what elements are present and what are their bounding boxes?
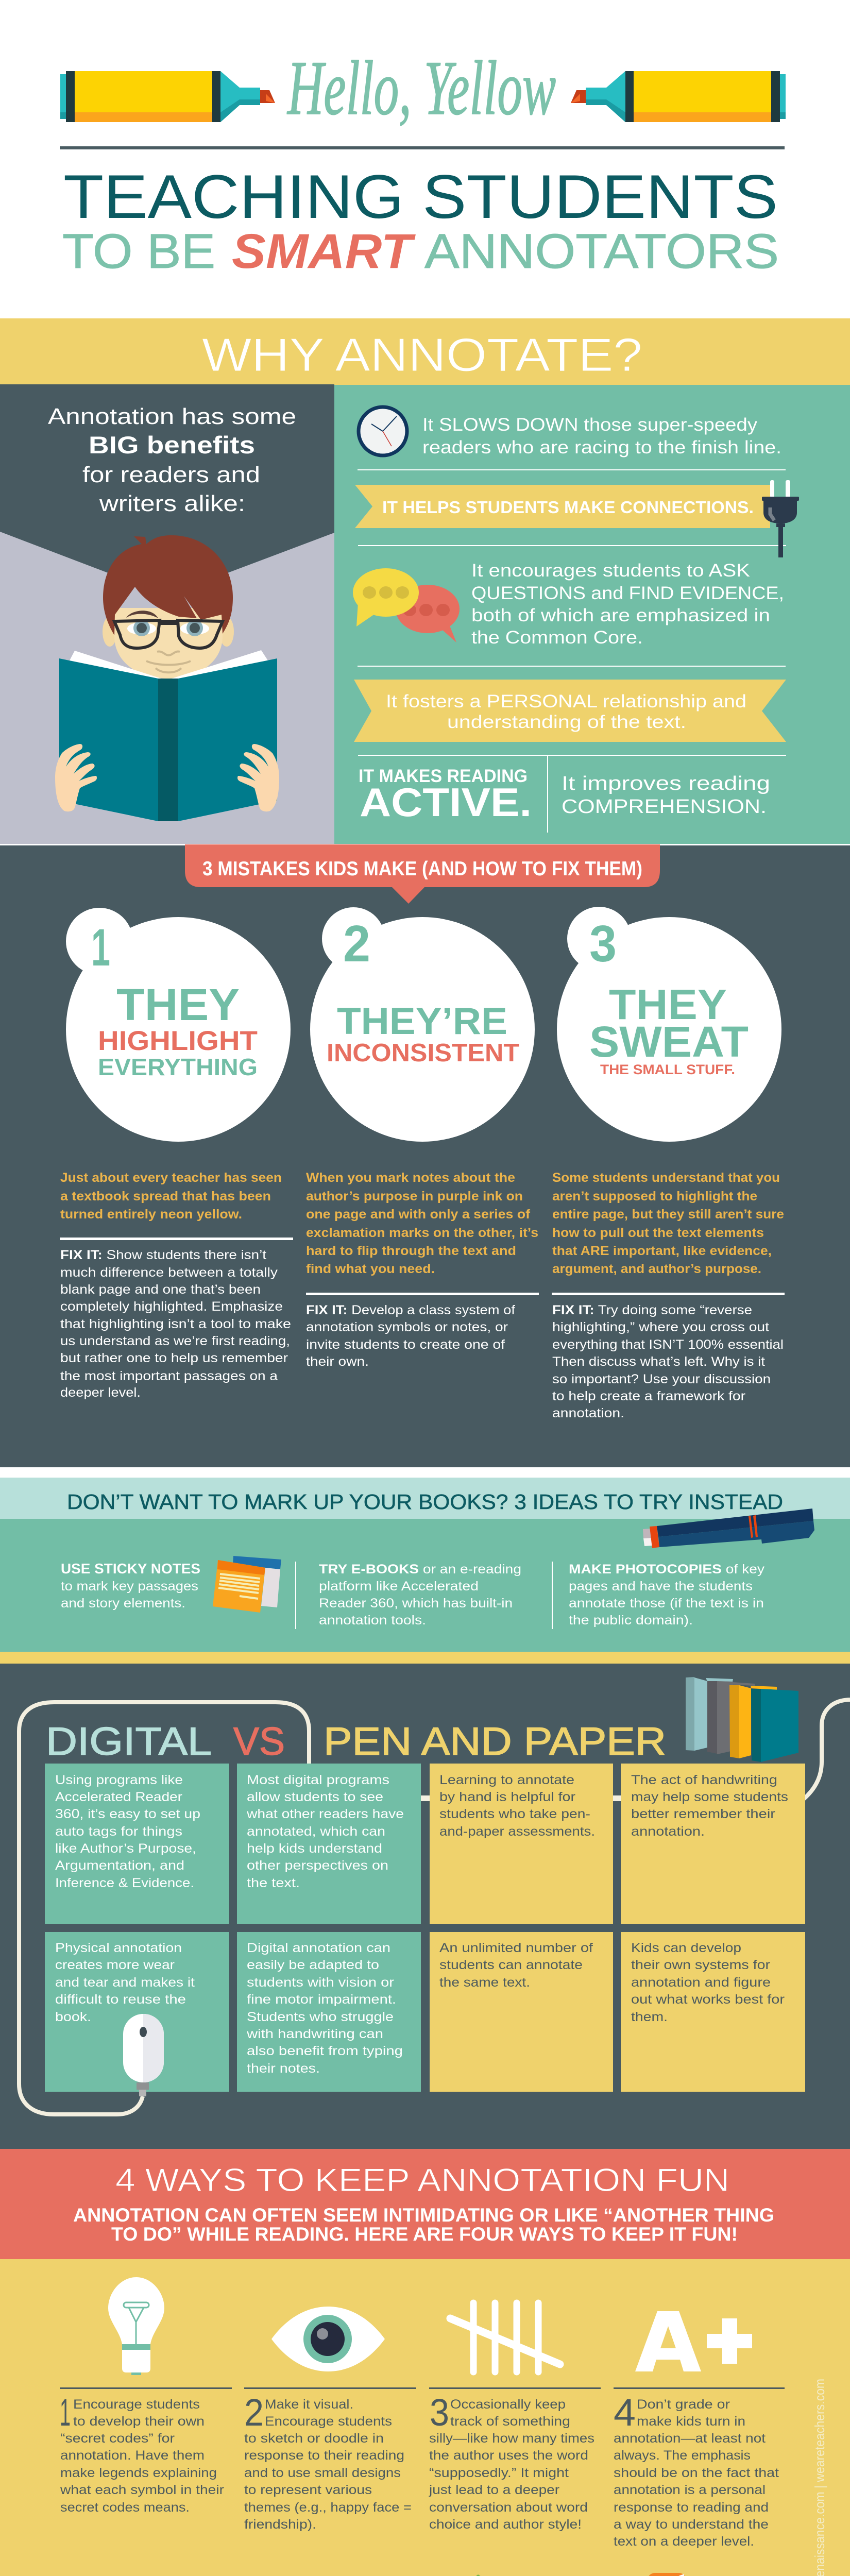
card: wear and tear: Physical annotation	[55, 1941, 182, 1955]
main title: SMART	[232, 224, 416, 279]
text: e-books	[319, 1562, 521, 1628]
main title: TEACHING STUDENTS	[63, 162, 778, 231]
text: way 3: “supposedly.” It might	[429, 2466, 569, 2480]
icon: clock	[359, 407, 407, 455]
circle: mistake 3: THEY	[609, 980, 727, 1028]
card: adapted	[237, 1932, 421, 2092]
card: annotate by hand: by hand is helpful for	[439, 1790, 575, 1804]
text: mistake 1 description: Just about every teacher has seen	[60, 1171, 282, 1185]
logo: accelerated reader 360	[648, 2573, 772, 2576]
heading: digital vs pen and paper: PEN AND PAPER	[324, 1720, 666, 1764]
text: mistake 2 description: author’s purpose in purple ink on	[306, 1189, 523, 1204]
card: own systems: annotation and figure	[631, 1975, 771, 1990]
text: way 3: conversation about word	[429, 2500, 588, 2515]
text: way 2: to represent various	[244, 2483, 372, 2497]
text: way 4: response to reading and	[614, 2500, 769, 2515]
text: ask questions: QUESTIONS and FIND EVIDENCE,	[471, 583, 784, 603]
card: auto tags: Inference & Evidence.	[55, 1876, 194, 1890]
text: sticky notes: and story elements.	[61, 1596, 185, 1611]
card: handwriting: better remember their	[631, 1807, 775, 1821]
panel: 3 mistakes	[0, 844, 850, 1467]
text: mistake 2 description: one page and with only a series of	[306, 1207, 531, 1222]
card: adapted: Students who struggle	[247, 2010, 394, 2024]
text: way 1: what each symbol in their	[60, 2483, 224, 2497]
text: mistake 2 description: When you mark notes about the	[306, 1171, 515, 1185]
text: way 4: always. The emphasis	[614, 2448, 751, 2463]
circle: mistake 2: THEY’RE	[337, 1001, 507, 1042]
text: slows down: It SLOWS DOWN those super-speedy	[422, 415, 758, 435]
text: mistake 3 fix: FIX IT: Try doing some “reverse	[552, 1303, 752, 1317]
circle: mistake 1: THEY	[116, 980, 240, 1030]
card: own systems: Kids can develop	[631, 1941, 741, 1955]
text: mistake 3 fix: highlighting,” where you cross out	[552, 1320, 769, 1334]
text: mistake 1 fix: but rather one to help us remember	[60, 1351, 288, 1365]
icon: mouse cord	[19, 1700, 850, 2114]
text: way 4	[614, 2391, 779, 2549]
text: way 3: 3	[430, 2391, 449, 2434]
card: wear and tear: and tear and makes it	[55, 1975, 195, 1990]
text: way 1: 1	[60, 2391, 71, 2434]
card: unlimited: the same text.	[439, 1975, 530, 1990]
panel: benefits list	[334, 385, 850, 844]
card: own systems: them.	[631, 2010, 668, 2024]
text: way 3: Occasionally keep	[450, 2397, 566, 2412]
circle: mistake 1: 1	[91, 918, 110, 977]
circle: mistake 3: THE SMALL STUFF.	[600, 1062, 735, 1077]
card: other readers: other perspectives on	[247, 1858, 388, 1873]
card: other readers: what other readers have	[246, 1807, 404, 1821]
circle: mistake 1: EVERYTHING	[98, 1054, 258, 1080]
text: way 3: just lead to a deeper	[429, 2483, 559, 2497]
card: unlimited: students can annotate	[439, 1958, 583, 1972]
text: mistake 2 fix: annotation symbols or notes, or	[306, 1320, 508, 1334]
circle: mistake 3: SWEAT	[589, 1018, 749, 1066]
ribbon: personal relationship: understanding of the text.	[447, 712, 686, 732]
text: way 2: Make it visual.	[265, 2397, 353, 2412]
card: auto tags	[45, 1764, 229, 1924]
card: annotate by hand	[430, 1764, 613, 1924]
text: mistake 3 description: how to pull out the text elements	[552, 1226, 764, 1240]
text: e-books: platform like Accelerated	[319, 1579, 479, 1594]
card: other readers: the text.	[247, 1876, 300, 1890]
text: slows down	[422, 415, 781, 457]
circle: mistake 3: 3	[589, 915, 617, 973]
text: way 2: and to use small designs	[244, 2466, 401, 2480]
icon: speech bubbles	[353, 568, 460, 642]
text: mistake 2 description: find what you need.	[306, 1262, 435, 1276]
text: way 4: 4	[614, 2391, 636, 2434]
heading: digital vs pen and paper: DIGITAL	[46, 1720, 212, 1764]
text: way 2: friendship).	[244, 2517, 316, 2532]
panel: 4 ways heading	[0, 2149, 850, 2259]
text: makes reading active: ACTIVE.	[360, 779, 532, 825]
icon: left highlighter	[60, 71, 275, 122]
text: way 4: make kids turn in	[637, 2414, 745, 2429]
text: mistake 1 fix: much difference between a totally	[60, 1265, 278, 1280]
text: big benefits intro	[48, 404, 296, 516]
heading: 3 ideas: DON’T WANT TO MARK UP YOUR BOOKS? 3 IDEAS TO TRY INSTEAD	[67, 1490, 783, 1514]
text: mistake 1 fix: the most important passages on a	[60, 1369, 278, 1383]
text: mistake 3 description: entire page, but they still aren’t sure	[552, 1207, 784, 1222]
text: way 4: annotation—at least not	[614, 2431, 766, 2446]
icon: sticky notes	[213, 1556, 281, 1613]
text: sticky notes	[61, 1561, 200, 1611]
icon: tally marks	[450, 2303, 560, 2372]
text: sticky notes: USE STICKY NOTES	[61, 1561, 200, 1577]
card: adapted: Digital annotation can	[247, 1941, 390, 1955]
ribbon: connections: IT HELPS STUDENTS MAKE CONNECTIONS.	[382, 498, 754, 517]
card: annotate by hand: and-paper assessments.	[439, 1824, 595, 1839]
icon: right highlighter	[571, 71, 786, 122]
card: handwriting: may help some students	[631, 1790, 788, 1804]
card: handwriting: annotation.	[631, 1824, 705, 1839]
circle: mistake 1: HIGHLIGHT	[98, 1026, 258, 1056]
icon: student reading	[55, 535, 279, 821]
card: other readers: help kids understand	[247, 1841, 382, 1856]
text: way 3	[429, 2391, 594, 2532]
card: auto tags: Argumentation, and	[55, 1858, 184, 1873]
text: way 2: to sketch or doodle in	[244, 2431, 384, 2446]
icon: plug	[762, 480, 799, 557]
text: way 4: should be on the fact that	[614, 2466, 779, 2480]
card: unlimited	[430, 1932, 613, 2092]
ribbon: personal relationship	[354, 680, 786, 742]
text: mistake 1 description: turned entirely neon yellow.	[60, 1207, 242, 1222]
text: way 2: response to their reading	[244, 2448, 404, 2463]
text: way 2: 2	[244, 2391, 264, 2434]
icon: computer mouse	[123, 2014, 164, 2096]
text: mistake 1 fix: deeper level.	[60, 1385, 141, 1400]
header	[60, 45, 786, 279]
text: makes reading active: IT MAKES READING	[359, 766, 528, 786]
text: way 2: Encourage students	[265, 2414, 392, 2429]
panel: digital vs pen and paper	[0, 1664, 850, 2149]
card: adapted: with handwriting can	[246, 2027, 383, 2041]
text: mistake 2 fix: their own.	[306, 1354, 369, 1369]
icon: eye	[271, 2307, 385, 2371]
text: mistake 1 description: a textbook spread that has been	[60, 1189, 271, 1204]
main title: TO BE	[62, 224, 215, 279]
text: photocopies: pages and have the students	[569, 1579, 753, 1594]
text: e-books: Reader 360, which has built-in	[319, 1596, 513, 1611]
text: big benefits intro: for readers and	[82, 462, 260, 487]
text: improves comprehension: COMPREHENSION.	[562, 796, 767, 818]
panel: 4 ways heading: TO DO” WHILE READING. HERE ARE FOUR WAYS TO KEEP IT FUN!	[111, 2224, 738, 2245]
card: own systems: their own systems for	[631, 1958, 770, 1972]
text: way 1: annotation. Have them	[60, 2448, 205, 2463]
text: mistake 3 fix: everything that ISN’T 100% essential	[552, 1337, 784, 1352]
text: way 3: the author uses the word	[429, 2448, 588, 2463]
circle: mistake 3	[557, 907, 781, 1142]
text: big benefits intro: writers alike:	[99, 491, 245, 516]
text: way 1: Encourage students	[73, 2397, 200, 2412]
text: big benefits intro: Annotation has some	[48, 404, 296, 429]
icon: pen	[643, 1509, 814, 1548]
text: mistake 1 fix: blank page and one that’s been	[60, 1282, 261, 1297]
card: adapted: their notes.	[247, 2061, 320, 2076]
banner: 3 mistakes	[185, 844, 660, 904]
text: photocopies: the public domain).	[569, 1613, 693, 1628]
text: mistake 3 fix: so important? Use your discussion	[552, 1372, 771, 1386]
text: mistake 2 description	[306, 1171, 538, 1276]
text: mistake 2 fix	[306, 1303, 515, 1369]
panel: 4 ways heading: 4 WAYS TO KEEP ANNOTATION FUN	[115, 2162, 729, 2198]
card: other readers: annotated, which can	[247, 1824, 385, 1839]
card: other readers: Most digital programs	[247, 1773, 389, 1787]
circle: mistake 2: 2	[343, 915, 370, 973]
text: way 1: “secret codes” for	[60, 2431, 175, 2446]
text: mistake 1 fix: that highlighting isn’t a tool to make	[60, 1317, 291, 1331]
text: mistake 3 fix: Then discuss what’s left. Why is it	[552, 1354, 765, 1369]
card: wear and tear: creates more wear	[55, 1958, 175, 1972]
text: way 1: secret codes means.	[60, 2500, 190, 2515]
text: way 3: silly—like how many times	[429, 2431, 594, 2446]
card: unlimited: An unlimited number of	[439, 1941, 593, 1955]
text: way 3: track of something	[450, 2414, 570, 2429]
heading: digital vs pen and paper: VS	[233, 1720, 285, 1764]
text: improves comprehension: It improves reading	[562, 773, 770, 794]
text: mistake 3 description: Some students understand that you	[552, 1171, 780, 1185]
text: mistake 3 fix: annotation.	[552, 1406, 624, 1420]
text: ask questions: both of which are emphasized in	[471, 605, 770, 625]
circle: mistake 1	[66, 908, 291, 1142]
text: mistake 1 fix	[60, 1248, 291, 1400]
card: wear and tear: book.	[55, 2010, 91, 2024]
ribbon: connections	[355, 485, 770, 528]
text: slows down: readers who are racing to the finish line.	[422, 437, 781, 457]
card: annotate by hand: students who take pen-	[439, 1807, 590, 1821]
text: mistake 1 description	[60, 1171, 282, 1222]
text: ask questions: It encourages students to ASK	[471, 561, 750, 581]
logo: we are teachers	[464, 2574, 626, 2576]
card: auto tags: like Author’s Purpose,	[55, 1841, 196, 1856]
text: mistake 2 fix: FIX IT: Develop a class system of	[306, 1303, 515, 1317]
text: way 1: make legends explaining	[60, 2466, 217, 2480]
card: wear and tear	[45, 1932, 229, 2092]
text: mistake 3 description: argument, and author’s purpose.	[552, 1262, 761, 1276]
text: mistake 3 fix: to help create a framework for	[552, 1389, 745, 1403]
main title	[62, 162, 779, 279]
text: photocopies	[569, 1562, 765, 1628]
icon: light bulb	[108, 2277, 164, 2375]
text: photocopies: MAKE PHOTOCOPIES of key	[569, 1562, 765, 1577]
main title: ANNOTATORS	[424, 224, 779, 279]
text: mistake 3 description: aren’t supposed to highlight the	[552, 1189, 757, 1204]
card: own systems: out what works best for	[631, 1992, 785, 2007]
panel: 4 ways heading: ANNOTATION CAN OFTEN SEEM INTIMIDATING OR LIKE “ANOTHER THING	[73, 2205, 774, 2226]
heading: digital vs pen and paper	[46, 1720, 666, 1764]
text: mistake 1 fix: FIX IT: Show students there isn’t	[60, 1248, 266, 1262]
text: big benefits intro: BIG benefits	[89, 431, 255, 459]
text: e-books: annotation tools.	[319, 1613, 426, 1628]
card: auto tags: Using programs like	[55, 1773, 183, 1787]
text: mistake 3 description: that ARE important, like evidence,	[552, 1244, 772, 1258]
card: annotate by hand: Learning to annotate	[439, 1773, 574, 1787]
text: way 4: Don’t grade or	[637, 2397, 730, 2412]
card: auto tags: auto tags for things	[55, 1824, 182, 1839]
panel: why annotate heading	[0, 318, 850, 385]
card: wear and tear: difficult to reuse the	[55, 1992, 186, 2007]
script title: Hello, Yellow	[287, 45, 556, 131]
text: way 4: annotation is a personal	[614, 2483, 766, 2497]
circle: mistake 2	[310, 907, 535, 1142]
card: adapted: fine motor impairment.	[247, 1992, 396, 2007]
card: handwriting	[621, 1764, 805, 1924]
panel: 4 ways content	[0, 2259, 850, 2576]
text: e-books: TRY E-BOOKS or an e-reading	[319, 1562, 521, 1577]
text: ask questions	[471, 561, 784, 648]
text: mistake 3 description	[552, 1171, 784, 1276]
panel: why annotate heading: WHY ANNOTATE?	[202, 329, 642, 381]
banner: 3 mistakes: 3 MISTAKES KIDS MAKE (AND HOW TO FIX THEM)	[202, 858, 642, 880]
card: adapted: students with vision or	[247, 1975, 394, 1990]
panel: big benefits reader	[0, 384, 334, 844]
card: auto tags: 360, it’s easy to set up	[55, 1807, 200, 1821]
card: handwriting: The act of handwriting	[631, 1773, 777, 1787]
text: improves comprehension	[562, 773, 770, 818]
icon: books	[686, 1677, 798, 1762]
text: way 2	[244, 2391, 412, 2532]
card: adapted: also benefit from typing	[247, 2044, 403, 2058]
circle: mistake 2: INCONSISTENT	[327, 1039, 519, 1067]
text: mistake 3 fix	[552, 1303, 784, 1420]
text: mistake 2 fix: invite students to create one of	[306, 1337, 505, 1352]
text: way 2: themes (e.g., happy face =	[244, 2500, 412, 2515]
card: other readers	[237, 1764, 421, 1924]
text: ask questions: the Common Core.	[471, 628, 643, 648]
text: photocopies: annotate those (if the text is in	[569, 1596, 764, 1611]
card: adapted: easily be adapted to	[247, 1958, 379, 1972]
card: auto tags: Accelerated Reader	[55, 1790, 182, 1804]
text: way 3: choice and author style!	[429, 2517, 582, 2532]
text: mistake 1 fix: completely highlighted. Emphasize	[60, 1299, 283, 1314]
ribbon: personal relationship: It fosters a PERSONAL relationship and	[386, 691, 746, 711]
text: way 4: a way to understand the	[614, 2517, 769, 2532]
text: mistake 1 fix: us understand as we’re first reading,	[60, 1334, 290, 1348]
text: sticky notes: to mark key passages	[61, 1579, 198, 1594]
panel: 3 ideas	[0, 1478, 850, 1664]
text: way 1: to develop their own	[73, 2414, 205, 2429]
text: way 4: text on a deeper level.	[614, 2534, 754, 2549]
card: other readers: allow students to see	[247, 1790, 383, 1804]
icon: A plus	[635, 2311, 752, 2371]
text: way 1	[60, 2391, 224, 2515]
text: mistake 2 description: hard to flip through the text and	[306, 1244, 516, 1258]
card: own systems	[621, 1932, 805, 2092]
text: mistake 2 description: exclamation marks on the other, it’s	[306, 1226, 538, 1240]
